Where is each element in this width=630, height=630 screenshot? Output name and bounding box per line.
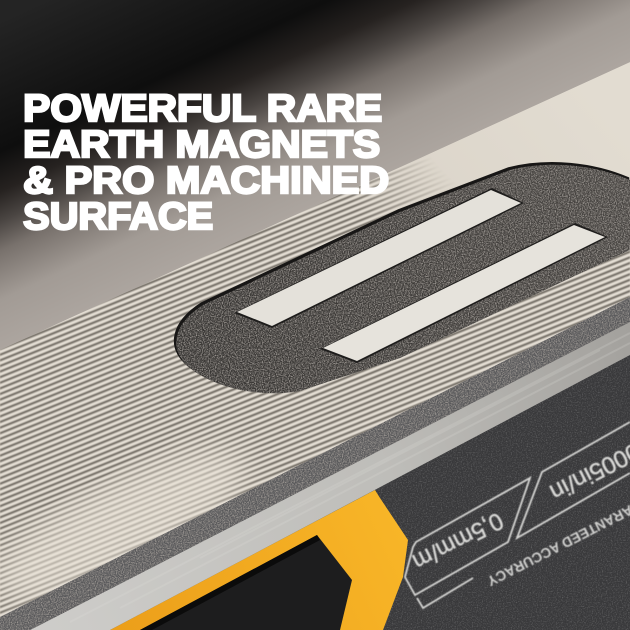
title: SURFACE	[23, 196, 213, 238]
dark grey level body	[0, 340, 630, 630]
magnet pad	[175, 163, 630, 393]
yellow end cap	[110, 490, 408, 630]
magnet strip two	[323, 225, 605, 361]
title: EARTH MAGNETS	[23, 124, 380, 166]
fine machined grooves	[0, 160, 630, 617]
corner bracket	[417, 578, 473, 608]
black grip inset	[140, 535, 352, 630]
textured pad surface	[176, 165, 630, 393]
frame: metric accuracy	[405, 478, 530, 595]
metric accuracy value: 0,5mm/m	[408, 507, 508, 575]
strip shadows	[234, 188, 524, 328]
bright glare on lower-left of face	[0, 437, 258, 610]
magnet strip one	[237, 190, 521, 326]
machined silver side band	[30, 322, 630, 630]
accuracy markings on the body	[405, 422, 630, 608]
title: POWERFUL RARE	[23, 88, 382, 130]
recess shadow	[175, 163, 628, 391]
title	[23, 88, 389, 238]
frame: imperial accuracy	[517, 422, 630, 538]
title: & PRO MACHINED	[23, 160, 389, 202]
rough grey chamfer	[0, 297, 630, 630]
